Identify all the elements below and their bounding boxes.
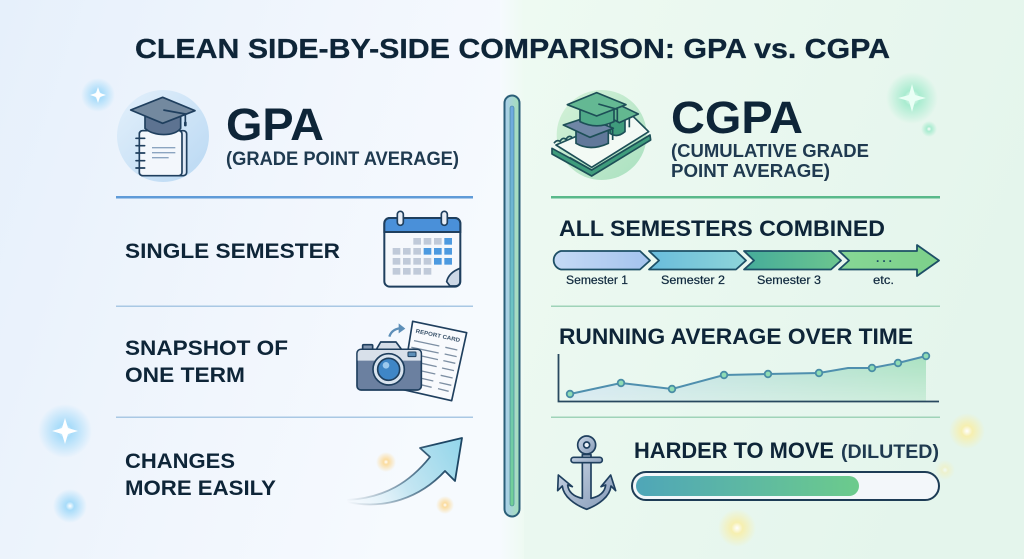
icon: stacked caps on book — [552, 90, 651, 180]
right panel background — [512, 0, 1024, 559]
text: changes more easily: MORE EASILY — [125, 477, 276, 500]
icon: calendar — [384, 211, 460, 287]
text: single semester: SINGLE SEMESTER — [125, 240, 340, 263]
heading: CGPA: CGPA — [671, 92, 803, 143]
subheading: CGPA: POINT AVERAGE) — [671, 161, 830, 181]
text: harder to move: (DILUTED) — [841, 442, 939, 463]
timeline labels: Semester 2 — [661, 275, 725, 287]
decorative glows: right — [718, 72, 985, 547]
timeline labels — [566, 251, 894, 287]
text: running average: RUNNING AVERAGE OVER TIME — [559, 324, 913, 349]
subheading: CGPA: (CUMULATIVE GRADE — [671, 141, 869, 161]
icon: camera and report card — [357, 321, 467, 401]
title: CLEAN SIDE-BY-SIDE COMPARISON: GPA vs. CGPA — [135, 33, 890, 64]
subheading: CGPA — [671, 141, 869, 181]
panel: GPA — [116, 90, 473, 504]
text: harder to move — [634, 438, 939, 463]
center divider — [504, 96, 520, 516]
text: snapshot of one term — [125, 337, 288, 387]
timeline labels: etc. — [873, 275, 894, 287]
text: harder to move: HARDER TO MOVE — [634, 438, 834, 463]
heading: GPA: GPA — [226, 99, 324, 150]
text: all semesters combined: ALL SEMESTERS COMBINED — [559, 216, 885, 241]
timeline labels: Semester 3 — [757, 275, 821, 287]
text: changes more easily: CHANGES — [125, 450, 235, 473]
icon: camera and report card: REPORT CARD — [415, 329, 460, 344]
progress bar — [632, 472, 939, 500]
text: snapshot of one term: SNAPSHOT OF — [125, 337, 288, 360]
line chart — [558, 353, 939, 402]
icon: anchor — [558, 436, 616, 509]
text: changes more easily — [125, 450, 276, 500]
icon: rising arrow — [347, 438, 462, 504]
semester timeline arrow — [554, 245, 939, 276]
timeline labels: ... — [876, 251, 892, 265]
timeline labels: Semester 1 — [566, 275, 628, 287]
left panel background — [0, 0, 512, 559]
text: snapshot of one term: ONE TERM — [125, 364, 245, 387]
decorative glows: left — [38, 78, 454, 523]
panel: CGPA — [551, 90, 940, 509]
icon: graduation cap on notebook — [117, 90, 209, 182]
subheading: GPA: (GRADE POINT AVERAGE) — [226, 149, 459, 170]
